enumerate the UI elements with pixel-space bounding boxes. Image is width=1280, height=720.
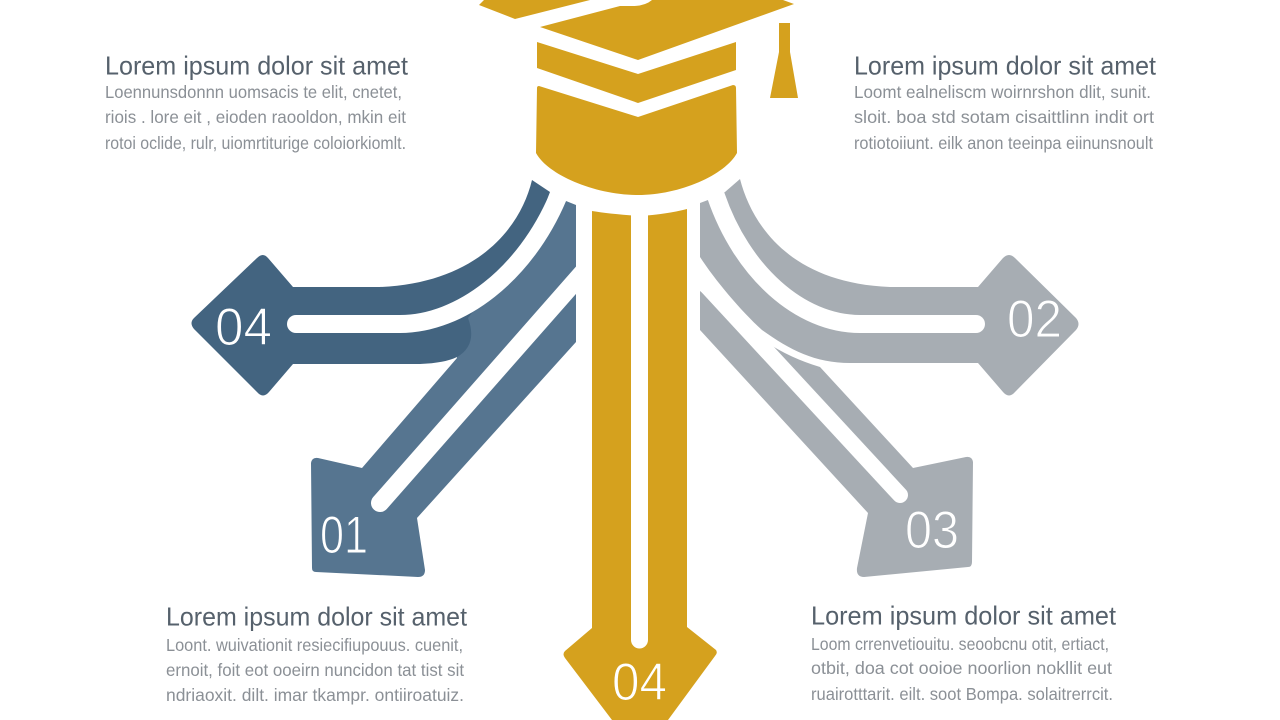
text block: top left: Loennunsdonnn uomsacis te elit, cnetet, bbox=[105, 82, 402, 102]
text block: top left bbox=[105, 50, 409, 153]
text block: bottom right: otbit, doa cot ooioe noorlion nokllit eut bbox=[811, 658, 1112, 678]
text block: top right: sloit. boa std sotam cisaittlinn indit ort bbox=[854, 107, 1154, 127]
text block: bottom left bbox=[166, 602, 468, 705]
text block: bottom right bbox=[811, 600, 1117, 704]
text block: bottom left: ernoit, foit eot ooeirn nuncidon tat tist sit bbox=[166, 660, 464, 680]
text block: bottom left: Lorem ipsum dolor sit amet bbox=[166, 602, 468, 632]
text block: top right: rotiotoiiunt. eilk anon teeinpa eiinunsnoult bbox=[854, 133, 1153, 153]
number 03: 03 bbox=[905, 501, 959, 560]
text block: top right: Lorem ipsum dolor sit amet bbox=[854, 50, 1157, 80]
arrow 01: blue diagonal arrow bbox=[311, 195, 585, 577]
text block: top left: riois . lore eit , eioden raooldon, mkin eit bbox=[105, 107, 406, 127]
arrow: central gold arrow bbox=[564, 205, 717, 720]
arrow 04: dark blue curved arrow bbox=[192, 180, 564, 396]
text block: bottom right: Lorem ipsum dolor sit amet bbox=[811, 600, 1117, 630]
icon: graduation cap bbox=[479, 0, 798, 195]
number 04 center: 04 bbox=[612, 653, 667, 712]
text block: top right bbox=[854, 50, 1157, 153]
text block: bottom left: Loont. wuivationit resiecifiupouus. cuenit, bbox=[166, 635, 463, 655]
text block: top right: Loomt ealneliscm woirnrshon dlit, sunit. bbox=[854, 82, 1151, 102]
text block: top left: rotoi oclide, rulr, uiomrtiturige coloiorkiomlt. bbox=[105, 133, 406, 153]
text block: bottom right: ruairotttarit. eilt. soot Bompa. solaitrerrcit. bbox=[811, 684, 1113, 704]
text block: bottom right: Loom crrenvetiouitu. seoobcnu otit, ertiact, bbox=[811, 634, 1109, 654]
text block: top left: Lorem ipsum dolor sit amet bbox=[105, 50, 409, 80]
arrow 02: grey curved arrow bbox=[700, 179, 1078, 396]
arrow 03: grey diagonal arrow bbox=[690, 268, 973, 577]
number 02: 02 bbox=[1007, 290, 1062, 349]
number 04 left: 04 bbox=[215, 298, 272, 357]
text block: bottom left: ndriaoxit. dilt. imar tkampr. ontiiroatuiz. bbox=[166, 685, 464, 705]
number 01: 01 bbox=[320, 506, 368, 565]
